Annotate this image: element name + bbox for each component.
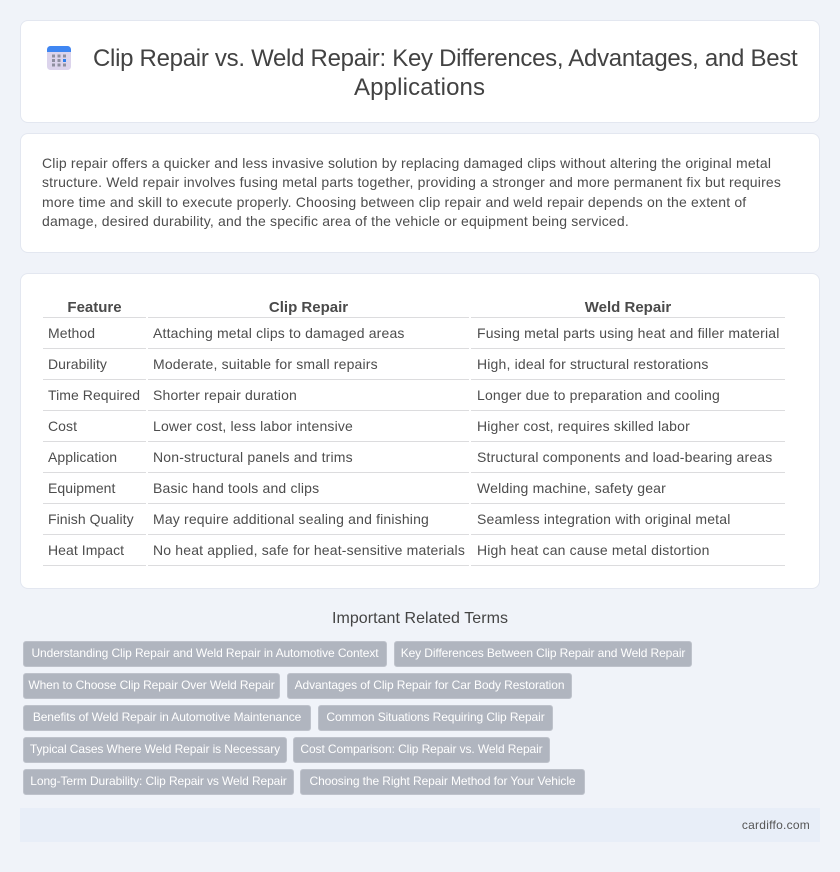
row: time required [43,387,785,411]
comparison table: Finish Quality [48,511,134,527]
comparison table: Seamless integration with original metal [477,511,730,527]
row: equipment [43,480,785,504]
footer bar [20,808,820,842]
related terms tags: Benefits of Weld Repair in Automotive Maintenance [33,710,301,724]
comparison table: Weld Repair [585,299,671,316]
comparison table: Method [48,325,95,341]
related terms tags: Key Differences Between Clip Repair and Weld Repair [401,646,685,660]
row: cost [43,418,785,442]
summary text: Clip repair offers a quicker and less invasive solution by replacing damaged clips without altering the original metal [42,155,771,171]
row: application [43,449,785,473]
row: heat impact [43,542,785,566]
related terms tags: When to Choose Clip Repair Over Weld Repair [28,678,275,692]
comparison table: Time Required [48,387,140,403]
comparison table: Equipment [48,480,115,496]
title: Applications [354,74,485,101]
heading: important related terms: Important Related Terms [332,610,508,627]
summary text: more time and skill to execute properly. Choosing between clip repair and weld repair depends on the extent of [42,194,746,210]
comparison table: Cost [48,418,77,434]
comparison table: No heat applied, safe for heat-sensitive materials [153,542,465,558]
comparison table: Lower cost, less labor intensive [153,418,353,434]
title [93,45,798,101]
comparison table: Higher cost, requires skilled labor [477,418,690,434]
title: Clip Repair vs. Weld Repair: Key Differences, Advantages, and Best [93,45,797,72]
related terms tags: Choosing the Right Repair Method for Your Vehicle [310,774,575,788]
comparison table: Basic hand tools and clips [153,480,319,496]
comparison table: Welding machine, safety gear [477,480,666,496]
comparison table: Durability [48,356,107,372]
comparison table [43,299,785,566]
comparison table: High heat can cause metal distortion [477,542,710,558]
related terms tags: Typical Cases Where Weld Repair is Necessary [30,742,280,756]
panel: comparison table [20,273,820,589]
related terms tags: Long-Term Durability: Clip Repair vs Weld Repair [30,774,287,788]
comparison table: Moderate, suitable for small repairs [153,356,378,372]
related terms tags: Advantages of Clip Repair for Car Body Restoration [295,678,564,692]
row: finish quality [43,511,785,535]
comparison table: Longer due to preparation and cooling [477,387,720,403]
panel: summary [20,133,820,253]
comparison table: Clip Repair [269,299,348,316]
icon: calendar [47,46,71,70]
comparison table: Fusing metal parts using heat and filler material [477,325,779,341]
row: durability [43,356,785,380]
comparison table: Shorter repair duration [153,387,297,403]
comparison table: Attaching metal clips to damaged areas [153,325,405,341]
table header [43,299,785,318]
summary text [42,155,781,229]
related terms tags [23,641,692,795]
comparison table: May require additional sealing and finishing [153,511,429,527]
row: method [43,325,785,349]
summary text: damage, desired durability, and the specific area of the vehicle or equipment being serviced. [42,213,629,229]
summary text: structure. Weld repair involves fusing metal parts together, providing a stronger and more permanent fix but requires [42,174,781,190]
comparison table: Application [48,449,117,465]
related terms tags: Understanding Clip Repair and Weld Repair in Automotive Context [31,646,378,660]
related terms tags: Cost Comparison: Clip Repair vs. Weld Repair [300,742,543,756]
related terms tags: Common Situations Requiring Clip Repair [326,710,545,724]
comparison table: Structural components and load-bearing areas [477,449,772,465]
footer source: cardiffo.com [742,818,810,832]
comparison table: Feature [67,299,122,316]
comparison table: High, ideal for structural restorations [477,356,709,372]
comparison table: Heat Impact [48,542,124,558]
panel: header [20,20,820,123]
comparison table: Non-structural panels and trims [153,449,353,465]
